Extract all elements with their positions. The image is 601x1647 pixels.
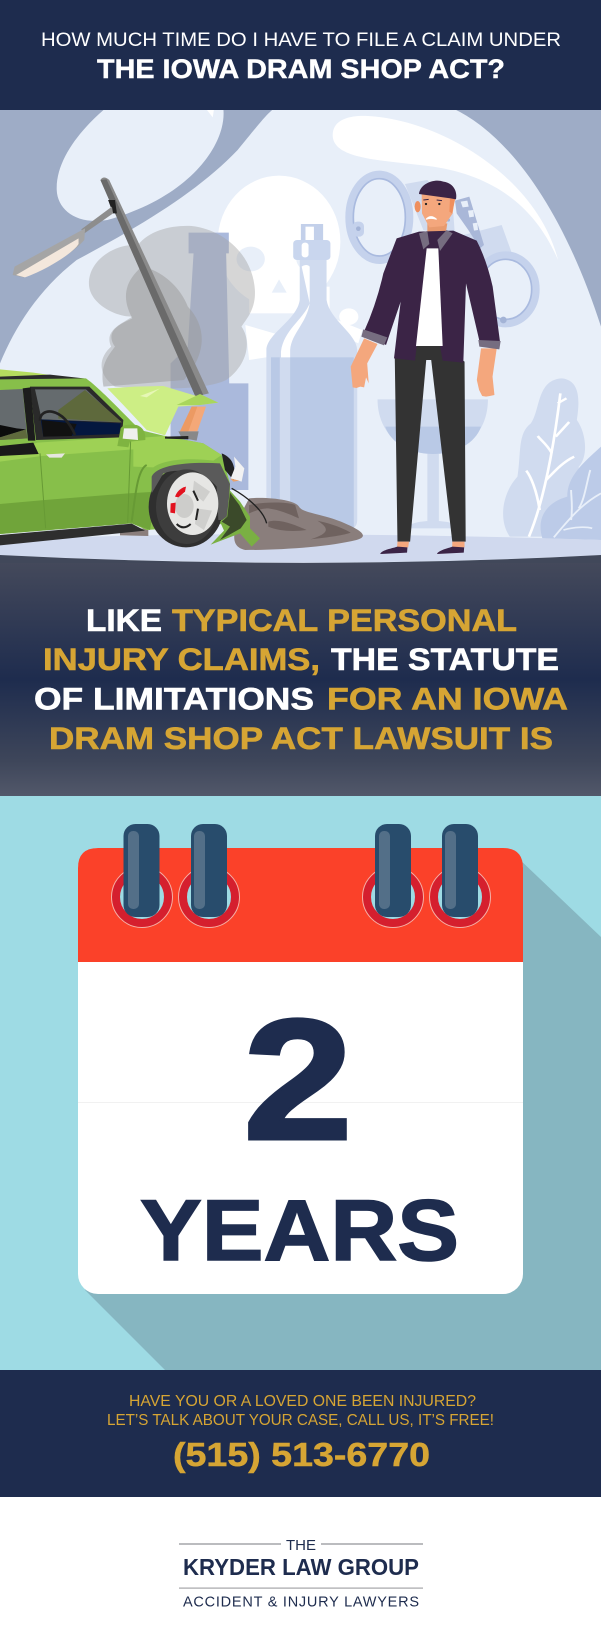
line 1: LIKE xyxy=(86,602,162,638)
panel: header xyxy=(0,0,601,110)
line 3: FOR AN IOWA xyxy=(327,680,568,716)
unit: YEARS xyxy=(140,1183,459,1279)
calendar xyxy=(78,824,523,1294)
scene backdrop xyxy=(0,110,601,583)
line 2 xyxy=(43,641,559,677)
collars xyxy=(419,231,429,249)
line 4: DRAM SHOP ACT LAWSUIT IS xyxy=(49,720,553,756)
line 3: OF LIMITATIONS xyxy=(34,680,314,716)
calendar shadow xyxy=(85,857,601,1370)
handcuffs xyxy=(349,175,536,323)
line 1: TYPICAL PERSONAL xyxy=(172,602,517,638)
wine glass xyxy=(378,399,488,528)
logo tagline: ACCIDENT & INJURY LAWYERS xyxy=(183,1594,419,1610)
logo the: THE xyxy=(286,1538,316,1554)
line 2: THE STATUTE xyxy=(331,641,559,677)
phone number: (515) 513-6770 xyxy=(173,1436,430,1473)
man: legs and hands xyxy=(351,338,497,554)
wine bottle xyxy=(266,224,357,530)
face xyxy=(422,194,455,227)
panel: footer logo xyxy=(0,1497,601,1647)
line 2: INJURY CLAIMS, xyxy=(43,641,320,677)
wheel xyxy=(149,463,230,547)
sleeve cuffs xyxy=(361,329,387,345)
hood strut xyxy=(180,407,206,431)
skull xyxy=(218,176,362,360)
binding rings xyxy=(112,824,490,928)
panel: calendar background xyxy=(0,796,601,1370)
jacket xyxy=(364,231,500,363)
line 3 xyxy=(34,680,568,716)
bumper xyxy=(222,453,235,481)
smoke xyxy=(89,226,255,389)
man: torso and head xyxy=(361,181,501,363)
heading line 2: THE IOWA DRAM SHOP ACT? xyxy=(97,54,505,84)
ground xyxy=(0,534,601,562)
bumper debris xyxy=(211,491,260,547)
open hood xyxy=(107,386,218,435)
hair xyxy=(419,181,456,199)
panel: statute statement xyxy=(0,563,601,796)
swoosh xyxy=(333,116,558,260)
panel: illustration xyxy=(0,110,601,583)
panel: call to action xyxy=(0,1370,601,1497)
number: 2 xyxy=(243,984,353,1176)
back bottle xyxy=(171,233,248,490)
mirror xyxy=(117,425,145,447)
neck xyxy=(427,223,447,242)
heading line 1: HOW MUCH TIME DO I HAVE TO FILE A CLAIM UNDER xyxy=(41,30,561,51)
plants xyxy=(503,378,601,540)
cta line 1: HAVE YOU OR A LOVED ONE BEEN INJURED? xyxy=(129,1393,476,1410)
car xyxy=(0,369,267,547)
lamp post xyxy=(13,177,209,397)
cta line 2: LET’S TALK ABOUT YOUR CASE, CALL US, IT’S FREE! xyxy=(107,1412,494,1429)
logo name: KRYDER LAW GROUP xyxy=(183,1554,419,1580)
shirt xyxy=(416,248,443,346)
puddle xyxy=(234,498,363,550)
